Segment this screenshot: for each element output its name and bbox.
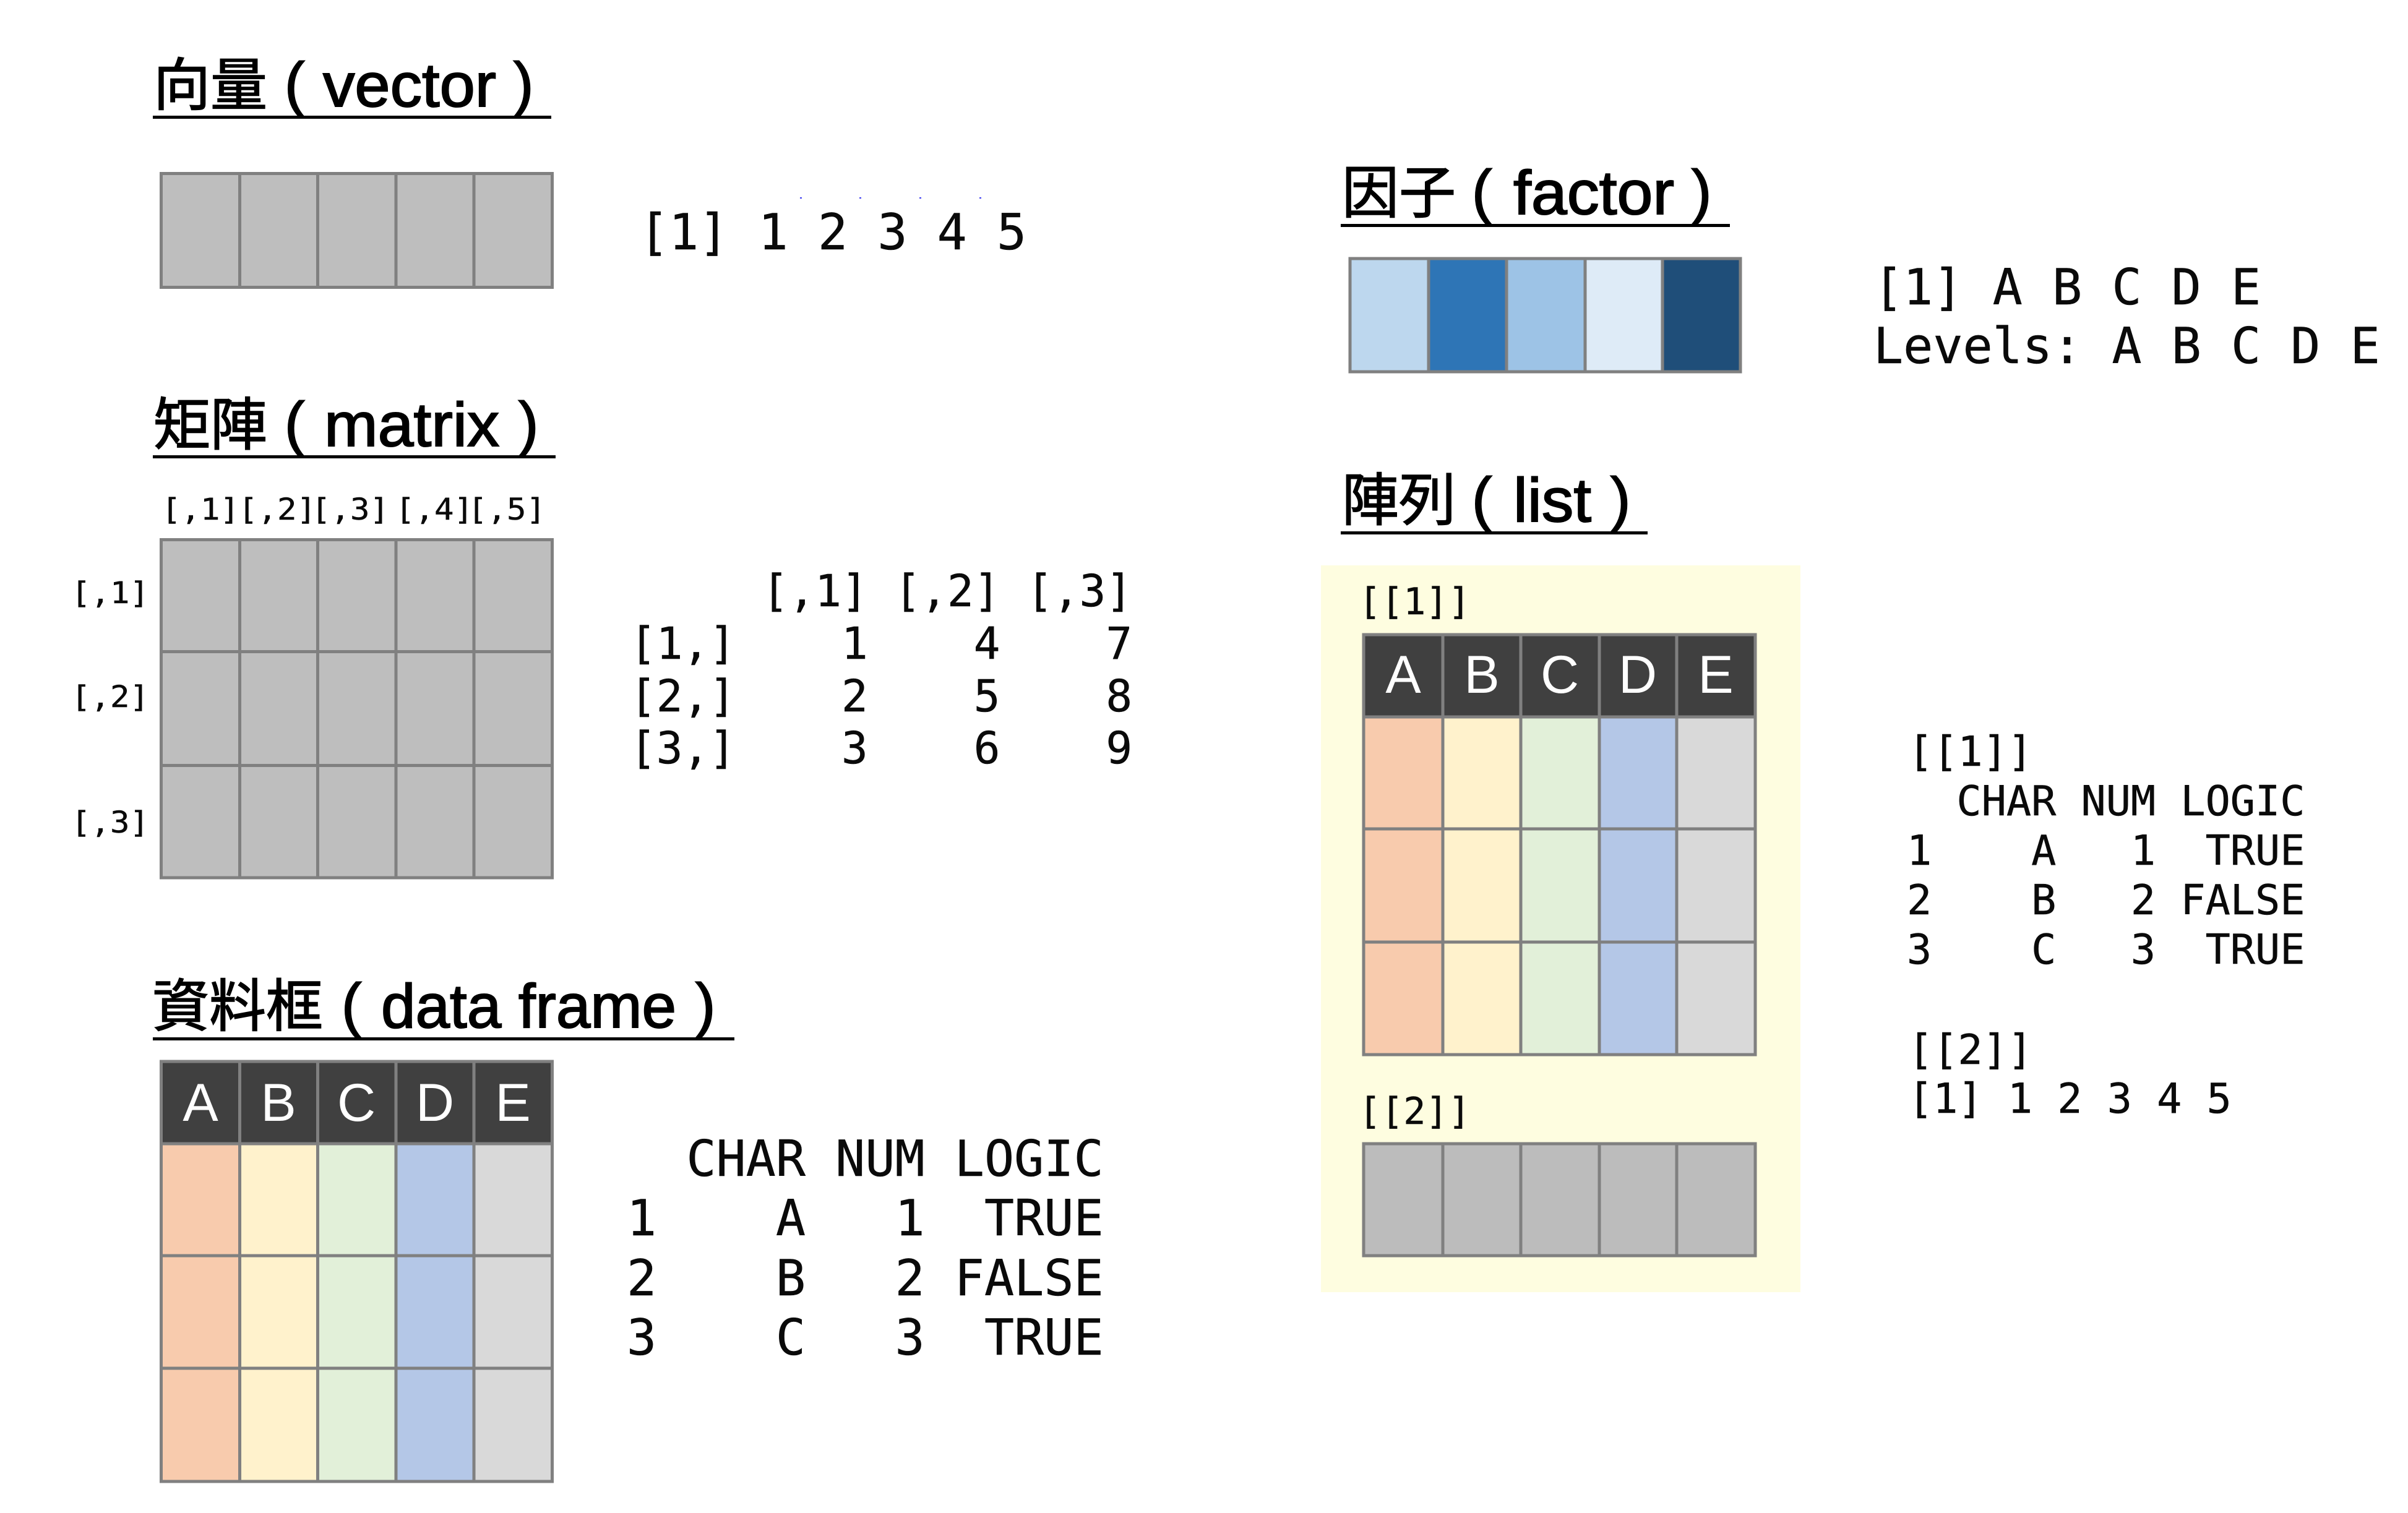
heading: vector: vector	[323, 51, 496, 120]
matrix column labels: [,2]	[238, 492, 316, 527]
heading: matrix: 矩陣	[153, 394, 267, 457]
heading: list: )	[1610, 465, 1630, 533]
vector grid	[161, 173, 552, 287]
matrix grid	[161, 539, 552, 878]
heading: factor: factor	[1513, 158, 1674, 228]
list console output: 3 C 3 TRUE	[1907, 925, 2305, 974]
heading: vector: (	[285, 50, 304, 118]
heading: data frame: (	[342, 971, 361, 1039]
list vector grid	[1364, 1144, 1755, 1256]
coloured columns	[1364, 717, 1755, 1055]
list console output: [[1]]	[1908, 727, 2032, 776]
header row: E	[1698, 645, 1734, 705]
list console output: [1] 1 2 3 4 5	[1908, 1074, 2232, 1123]
matrix console output: [,1] [,2] [,3]	[630, 565, 1132, 617]
matrix console output: [1,] 1 4 7	[630, 618, 1132, 669]
header row: A	[183, 1073, 218, 1133]
heading: matrix	[153, 390, 556, 460]
list console output	[1907, 727, 2305, 1123]
matrix row labels	[71, 576, 149, 840]
heading: vector: )	[514, 50, 533, 118]
heading: factor	[1341, 158, 1730, 228]
data frame console output	[627, 1130, 1104, 1366]
matrix row labels: [,3]	[71, 805, 149, 840]
data frame console output: 3 C 3 TRUE	[627, 1309, 1104, 1366]
heading: list: 陣列	[1342, 469, 1456, 533]
header row: D	[416, 1073, 454, 1133]
heading: data frame: data frame	[381, 972, 676, 1041]
matrix row labels: [,1]	[71, 576, 149, 611]
data frame console output: 1 A 1 TRUE	[627, 1189, 1104, 1247]
matrix column labels: [,3]	[311, 492, 389, 527]
heading: matrix: matrix	[324, 390, 499, 460]
label: second list element: [[2]]	[1359, 1090, 1471, 1133]
heading: factor: 因子	[1342, 162, 1456, 225]
heading: factor: )	[1692, 158, 1711, 225]
heading: data frame: 資料框	[152, 975, 323, 1039]
panel: list contents	[1321, 565, 1800, 1292]
matrix row labels: [,2]	[71, 680, 149, 714]
header row: C	[1541, 645, 1579, 705]
header row: E	[495, 1073, 531, 1133]
matrix console output: [2,] 2 5 8	[630, 671, 1132, 722]
header row: C	[337, 1073, 376, 1133]
list console output: [[2]]	[1908, 1026, 2032, 1074]
data frame console output: 2 B 2 FALSE	[627, 1249, 1104, 1307]
heading: data frame: )	[695, 971, 715, 1039]
heading: data frame	[152, 971, 734, 1041]
label: first list element: [[1]]	[1359, 580, 1471, 624]
heading: vector: 向量	[153, 54, 267, 118]
heading: matrix: (	[285, 390, 304, 457]
heading: matrix: )	[518, 390, 538, 457]
matrix console output	[630, 565, 1132, 774]
matrix console output: [3,] 3 6 9	[630, 722, 1132, 774]
data frame table	[161, 1061, 552, 1481]
matrix column labels: [,1]	[161, 492, 239, 527]
header row: B	[1464, 645, 1500, 705]
list console output: CHAR NUM LOGIC	[1907, 777, 2305, 825]
header row: A	[1385, 645, 1421, 705]
coloured columns	[161, 1144, 552, 1481]
list data frame table	[1364, 635, 1755, 1055]
header row: B	[260, 1073, 296, 1133]
heading: list: (	[1472, 465, 1492, 533]
heading: list: list	[1513, 466, 1591, 535]
list console output: 1 A 1 TRUE	[1907, 826, 2305, 875]
matrix column labels: [,4]	[395, 492, 473, 527]
header row	[161, 1061, 552, 1144]
heading: factor: (	[1472, 158, 1492, 225]
vector console output: [1] 1 2 3 4 5	[639, 204, 1026, 261]
header row	[1364, 635, 1755, 717]
matrix column labels: [,5]	[468, 492, 546, 527]
data frame console output: CHAR NUM LOGIC	[627, 1130, 1104, 1188]
factor console output	[1873, 259, 2380, 375]
heading: list	[1341, 465, 1648, 535]
factor console output: Levels: A B C D E	[1873, 317, 2380, 375]
matrix column labels	[161, 492, 546, 527]
header row: D	[1619, 645, 1657, 705]
factor console output: [1] A B C D E	[1873, 259, 2261, 316]
list console output: 2 B 2 FALSE	[1907, 876, 2305, 924]
factor grid	[1350, 259, 1740, 372]
heading: vector	[153, 50, 551, 120]
